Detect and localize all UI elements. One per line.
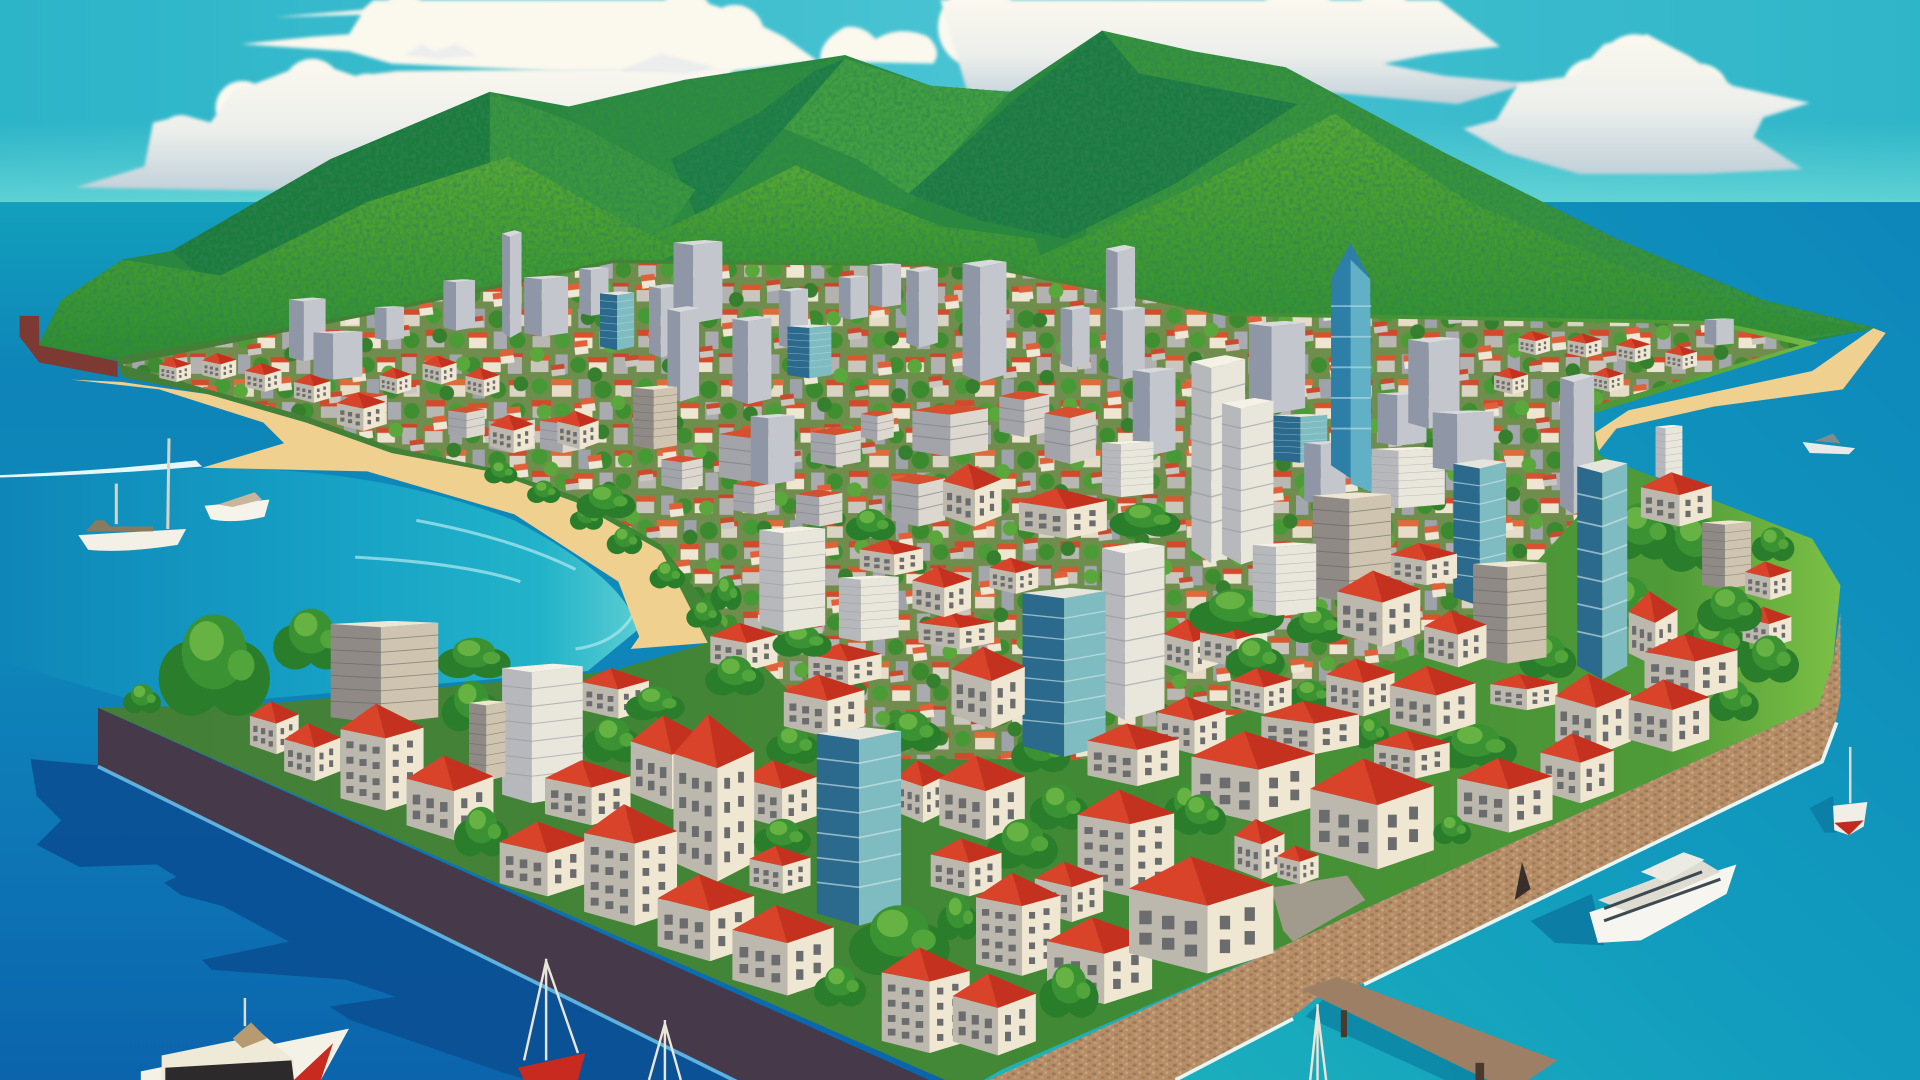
cloud: lower left bank — [76, 59, 735, 191]
buildings, right side of the platform — [1087, 673, 1709, 884]
back ridge lit face — [784, 59, 1010, 196]
harbour plaza — [1271, 876, 1365, 942]
sea: left side — [0, 202, 980, 1080]
left sea wall — [98, 708, 967, 1080]
foam trail on bay — [0, 460, 202, 478]
wall shadow notch — [1515, 862, 1531, 900]
mountain base silhouette — [37, 31, 1876, 361]
low-rise neighbourhood texture — [122, 263, 1800, 759]
bay water — [0, 468, 637, 708]
sea: right side — [980, 202, 1920, 1080]
trees: mid city — [577, 484, 1799, 830]
boat: mast by pier — [1310, 1004, 1326, 1080]
tan tower — [633, 386, 677, 449]
left massif shaded face — [171, 92, 490, 294]
sky — [0, 0, 1920, 208]
horizon glow — [0, 0, 1920, 203]
surf lines — [355, 520, 634, 649]
shadow of city on the water — [31, 759, 738, 1080]
city towers — [759, 459, 1738, 757]
pier — [1302, 977, 1558, 1080]
far left sea wall — [20, 316, 118, 377]
left front ridge — [37, 157, 680, 358]
mid-rise blocks — [340, 391, 1096, 527]
back ridge shaded face — [671, 59, 845, 220]
tall blue skyscraper — [1331, 242, 1371, 492]
low-rise neighbourhood second layer — [122, 263, 1800, 759]
foam below left wall — [98, 767, 738, 1080]
boat: sailboat in the bay — [78, 438, 186, 551]
left massif lit slope — [490, 92, 696, 282]
back ridge — [563, 55, 1010, 220]
tower group far left — [289, 298, 326, 361]
boat: red sailboat at right — [1810, 747, 1867, 835]
front-left towers — [250, 621, 819, 803]
right beach — [1592, 328, 1886, 451]
far towers — [289, 230, 1734, 463]
right front ridge — [1022, 114, 1867, 355]
right massif shaded face — [909, 31, 1298, 239]
buildings, centre of the platform — [545, 674, 1174, 940]
low-rise houses, far left and far right — [159, 331, 1697, 403]
cloud: upper left — [241, 0, 937, 73]
right massif lit slope — [1078, 31, 1876, 355]
city ground — [98, 260, 1840, 1080]
mid towers — [633, 242, 1794, 606]
boat: mast at bottom — [649, 1020, 681, 1080]
mountains — [37, 31, 1876, 361]
buildings, front row — [340, 704, 1273, 1056]
boat: white yacht in the bay — [204, 492, 269, 521]
boat: cruise ship — [1531, 852, 1736, 945]
cloud: upper right — [938, 0, 1531, 104]
middle front ridge — [651, 165, 1053, 294]
upper beach and left shoreline — [71, 380, 713, 649]
front-left trees — [123, 609, 511, 731]
trees along the beach — [484, 461, 742, 628]
boat: small yacht at right — [1802, 433, 1855, 454]
foam below right wall — [1176, 722, 1837, 1080]
cloud: far right — [1463, 34, 1810, 174]
boat: red motor yacht — [141, 998, 349, 1080]
boat: red sailboat at bottom — [518, 959, 585, 1080]
mid red-roofed blocks — [337, 392, 1791, 719]
right sea wall — [967, 612, 1840, 1080]
